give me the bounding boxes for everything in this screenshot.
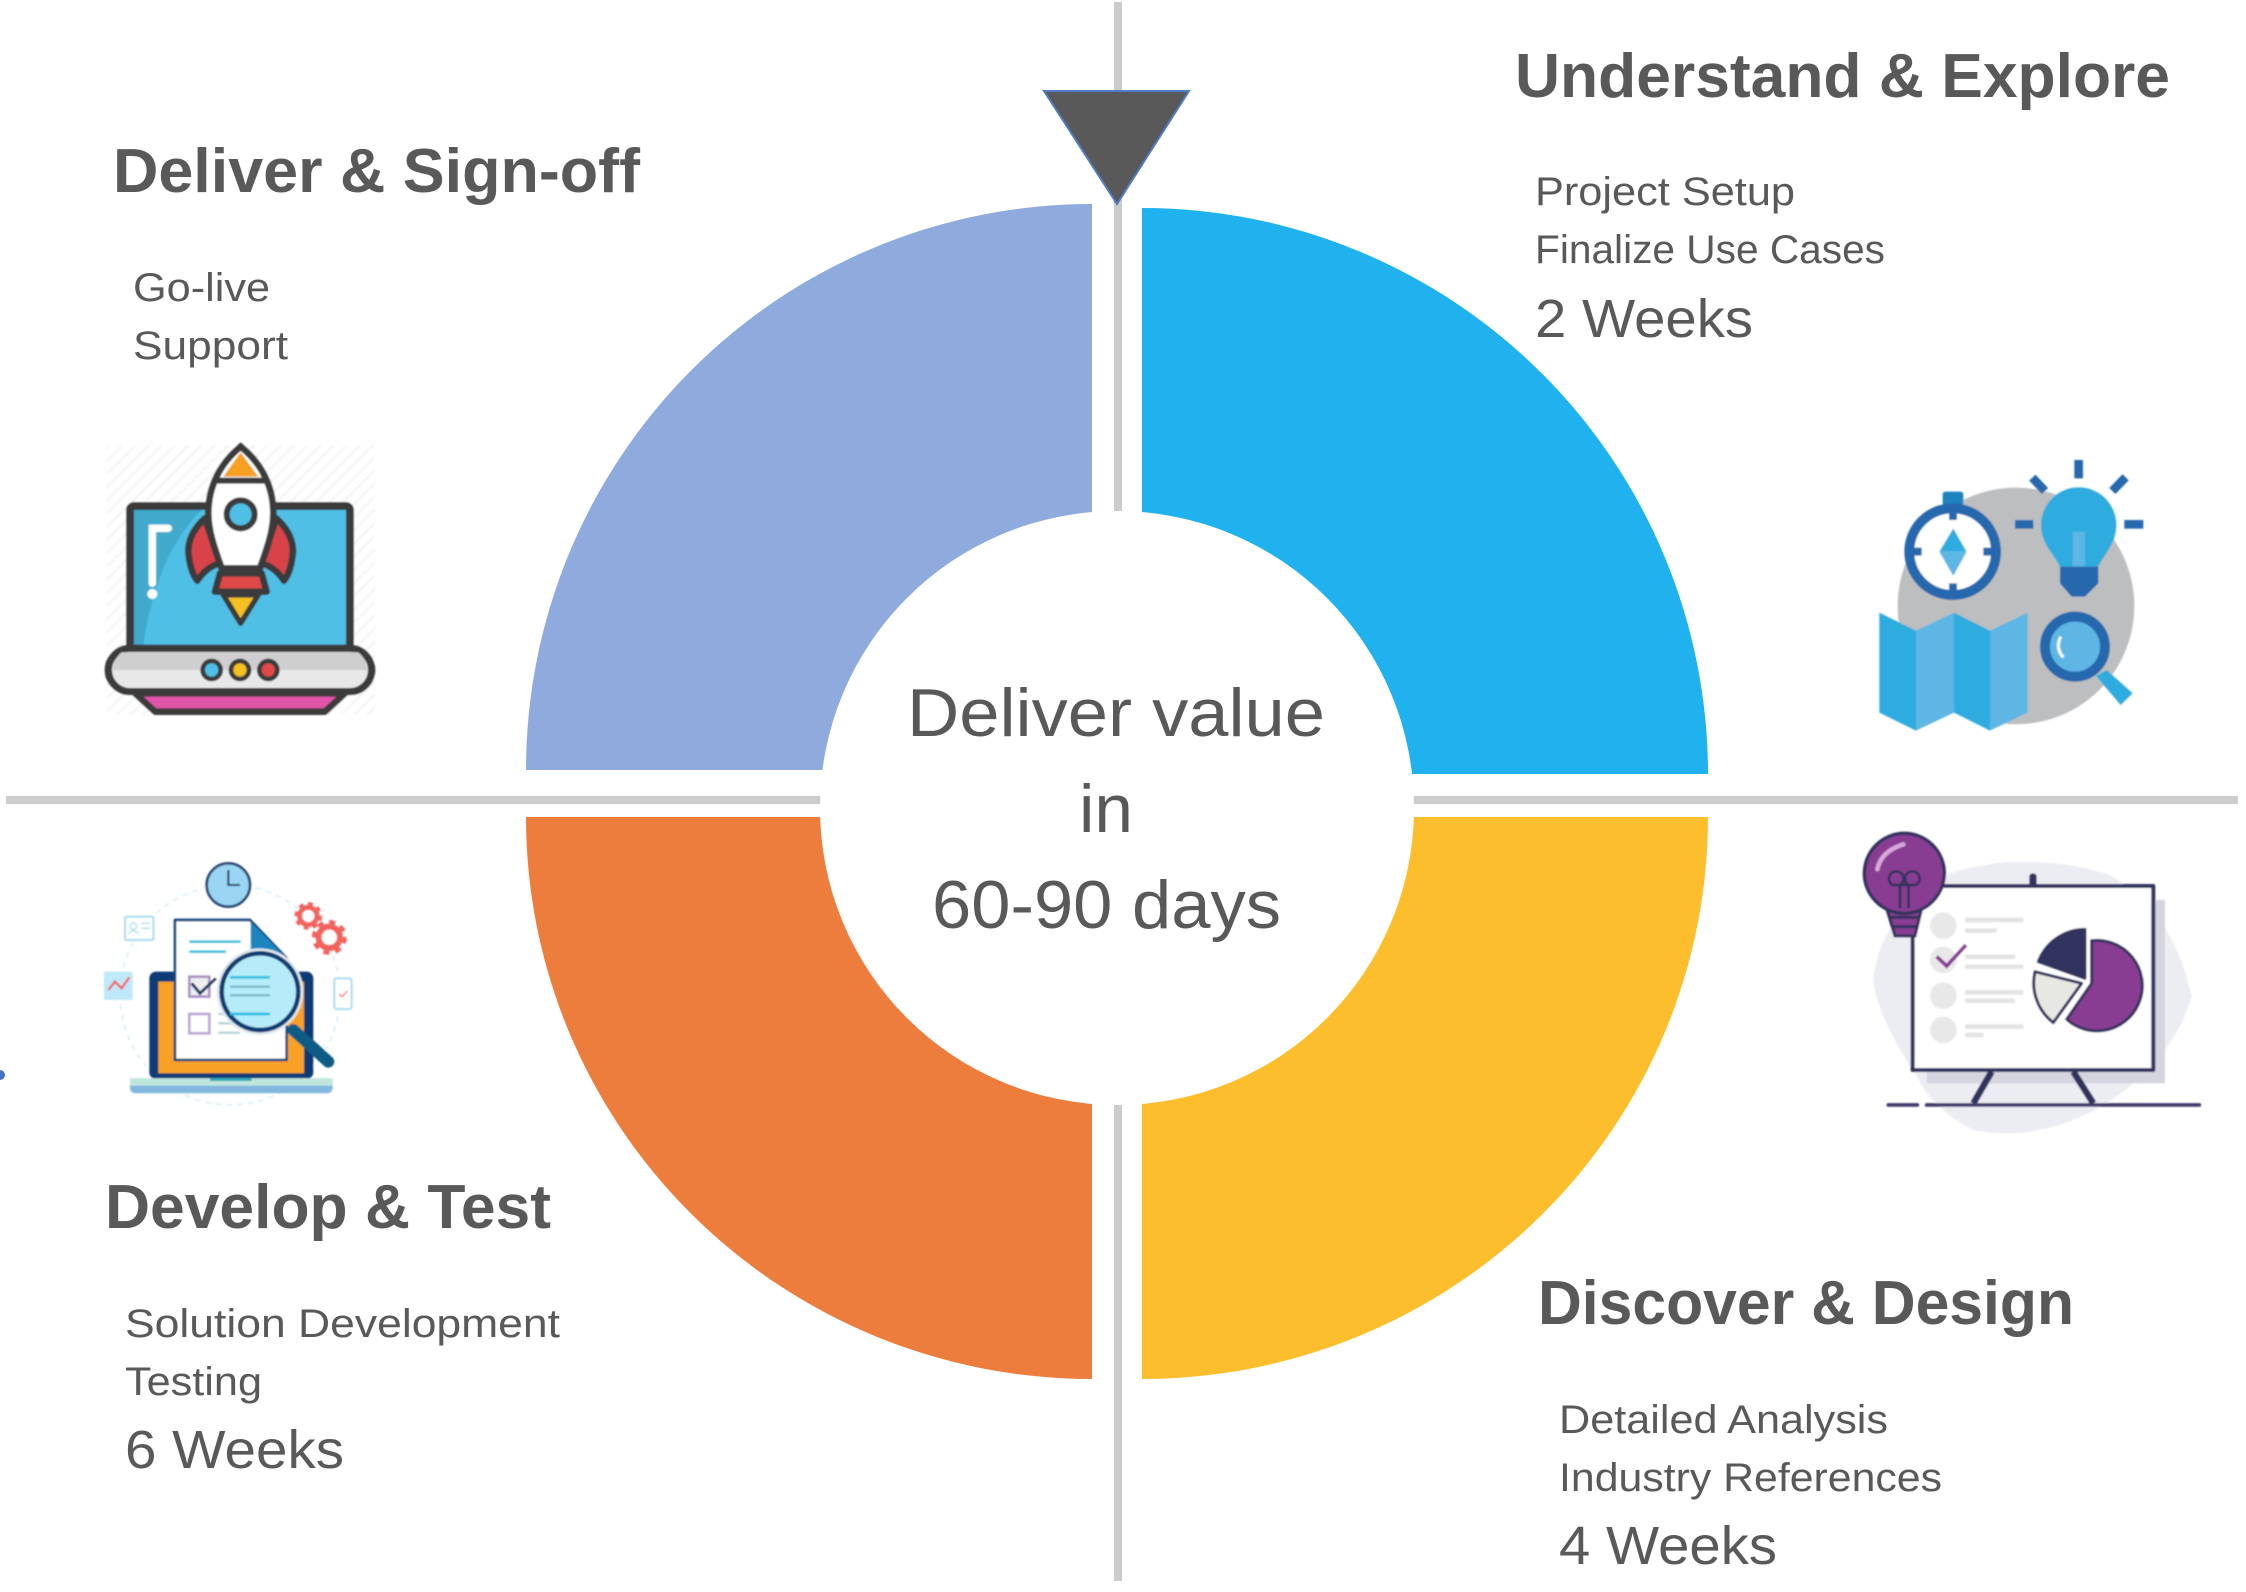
horizontal axis line — [6, 796, 2238, 804]
icon: rocket launching from laptop — [107, 445, 375, 715]
icon: compass, bulb, map and magnifier — [1879, 460, 2143, 731]
task list: Testing — [125, 1360, 262, 1404]
center circle with message — [820, 511, 1414, 1105]
pointer triangle — [1044, 91, 1189, 204]
task list: Go-live — [133, 266, 270, 310]
vertical axis line — [1114, 2, 1122, 1581]
task list — [1559, 1398, 1942, 1500]
heading: Develop & Test: Develop & Test — [105, 1173, 551, 1242]
center circle with message: Deliver value — [907, 675, 1325, 751]
task list: Detailed Analysis — [1559, 1398, 1888, 1442]
heading: Deliver & Sign-off: Deliver & Sign-off — [113, 137, 640, 206]
panel: Understand & Explore — [1515, 42, 2170, 731]
task list: Support — [133, 324, 288, 368]
center circle with message: in — [1079, 771, 1133, 847]
task list: Solution Development — [125, 1302, 560, 1346]
center circle with message: 60-90 days — [932, 867, 1281, 943]
icon: checklist under magnifier on laptop — [104, 863, 352, 1105]
task list: Finalize Use Cases — [1535, 228, 1885, 272]
donut quadrant: Deliver & Sign-off — [526, 204, 1092, 770]
small blue marker — [0, 1070, 5, 1080]
duration: 6 Weeks — [125, 1420, 344, 1480]
panel: Discover & Design — [1538, 833, 2199, 1576]
task list: Industry References — [1559, 1456, 1942, 1500]
donut quadrant: Discover & Design — [1142, 817, 1708, 1379]
task list — [133, 266, 288, 368]
duration: 2 Weeks — [1535, 289, 1753, 349]
panel: Develop & Test — [104, 863, 560, 1480]
heading: Discover & Design: Discover & Design — [1538, 1269, 2074, 1338]
task list — [1535, 170, 1885, 272]
donut quadrant: Understand & Explore — [1142, 208, 1708, 774]
duration: 4 Weeks — [1559, 1516, 1777, 1576]
heading: Understand & Explore: Understand & Explore — [1515, 42, 2170, 111]
panel: Deliver & Sign-off — [107, 137, 640, 715]
task list: Project Setup — [1535, 170, 1795, 214]
donut quadrant: Develop & Test — [526, 817, 1092, 1379]
icon: presentation board with pie chart and bulb — [1864, 833, 2199, 1133]
task list — [125, 1302, 560, 1404]
